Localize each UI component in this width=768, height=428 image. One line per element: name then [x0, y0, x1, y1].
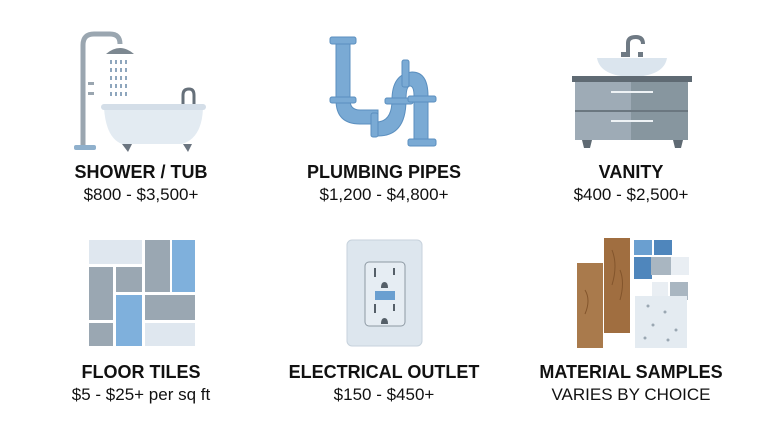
label: plumbing pipes [307, 162, 461, 204]
icon: electrical outlet [347, 240, 422, 346]
label: plumbing pipes: $1,200 - $4,800+ [319, 185, 449, 204]
label: shower / tub: SHOWER / TUB [74, 162, 208, 182]
label: electrical outlet: $150 - $450+ [334, 385, 434, 404]
label: vanity: VANITY [599, 162, 663, 182]
icon: vanity [572, 37, 692, 148]
icon: shower and tub [74, 34, 206, 152]
label: floor tiles: FLOOR TILES [82, 362, 200, 382]
label: plumbing pipes: PLUMBING PIPES [307, 162, 461, 182]
label: shower / tub: $800 - $3,500+ [84, 185, 198, 204]
label: material samples [539, 362, 723, 404]
label: electrical outlet: ELECTRICAL OUTLET [289, 362, 479, 382]
label: floor tiles [72, 362, 210, 404]
label: shower / tub [74, 162, 208, 204]
label: floor tiles: $5 - $25+ per sq ft [72, 385, 210, 404]
icon: plumbing pipes [330, 37, 436, 146]
label: vanity [574, 162, 688, 204]
label: material samples: MATERIAL SAMPLES [539, 362, 723, 382]
label: electrical outlet [289, 362, 480, 404]
icon: material samples [577, 238, 689, 348]
label: vanity: $400 - $2,500+ [574, 185, 688, 204]
icon: floor tiles [89, 240, 195, 346]
label: material samples: VARIES BY CHOICE [551, 385, 711, 404]
